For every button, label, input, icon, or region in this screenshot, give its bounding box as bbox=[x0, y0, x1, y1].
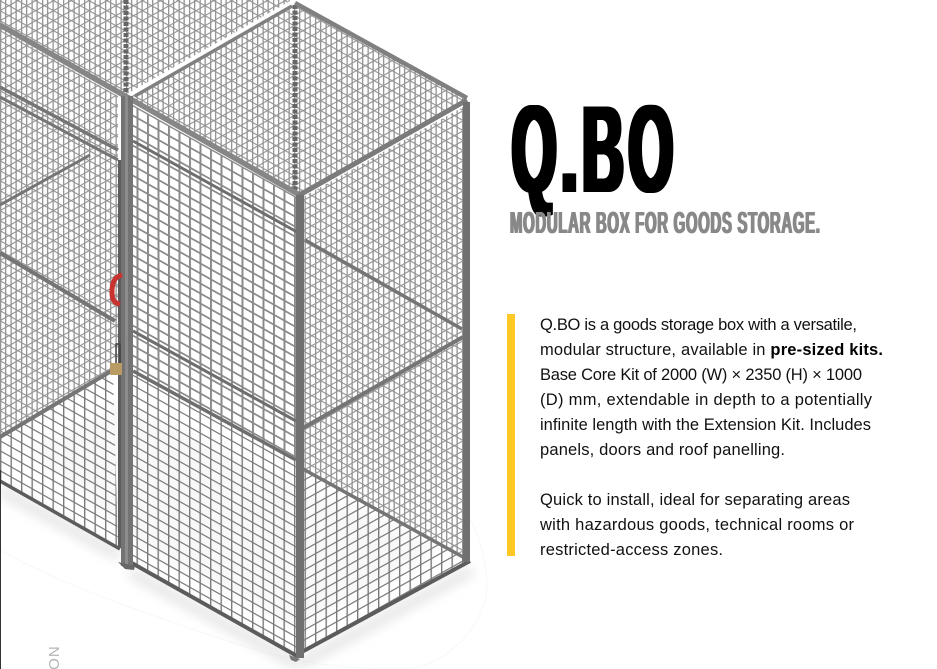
yellow accent bar bbox=[507, 314, 515, 556]
frame: front panel beams bbox=[130, 141, 297, 656]
body text: Base Core Kit of 2000 (W) × 2350 (H) × 1000 bbox=[540, 366, 862, 384]
frame: back posts and roof beams bbox=[0, 0, 467, 196]
mesh: door panel bbox=[0, 28, 118, 548]
frame: side panel beams bbox=[298, 240, 470, 654]
body text: restricted-access zones. bbox=[540, 541, 723, 559]
body text: Q.BO is a goods storage box with a versatile, bbox=[540, 316, 857, 334]
body text: modular structure, available in pre-sized kits. bbox=[540, 341, 883, 359]
mesh: side panel, floor section bbox=[303, 470, 463, 652]
icon: padlock bbox=[110, 344, 122, 375]
icon: red door handle bbox=[112, 275, 122, 304]
mesh: front panel, floor section bbox=[133, 373, 297, 655]
mesh: roof panels bbox=[0, 0, 467, 195]
body text bbox=[539, 316, 883, 559]
floor shadow bbox=[0, 400, 487, 669]
mesh: side panel, upper bbox=[303, 107, 463, 557]
body text: Quick to install, ideal for separating areas bbox=[540, 491, 850, 509]
mesh: front panel, upper section bbox=[133, 105, 297, 460]
body text: panels, doors and roof panelling. bbox=[540, 441, 785, 459]
frame: posts bbox=[0, 96, 470, 669]
body text: infinite length with the Extension Kit. Includes bbox=[540, 416, 871, 434]
body text: with hazardous goods, technical rooms or bbox=[539, 516, 854, 534]
subtitle: MODULAR BOX FOR GOODS STORAGE. bbox=[510, 205, 821, 240]
body text: (D) mm, extendable in depth to a potentially bbox=[540, 391, 873, 409]
frame: door beams bbox=[0, 87, 120, 549]
title: Q.BO bbox=[512, 81, 678, 219]
